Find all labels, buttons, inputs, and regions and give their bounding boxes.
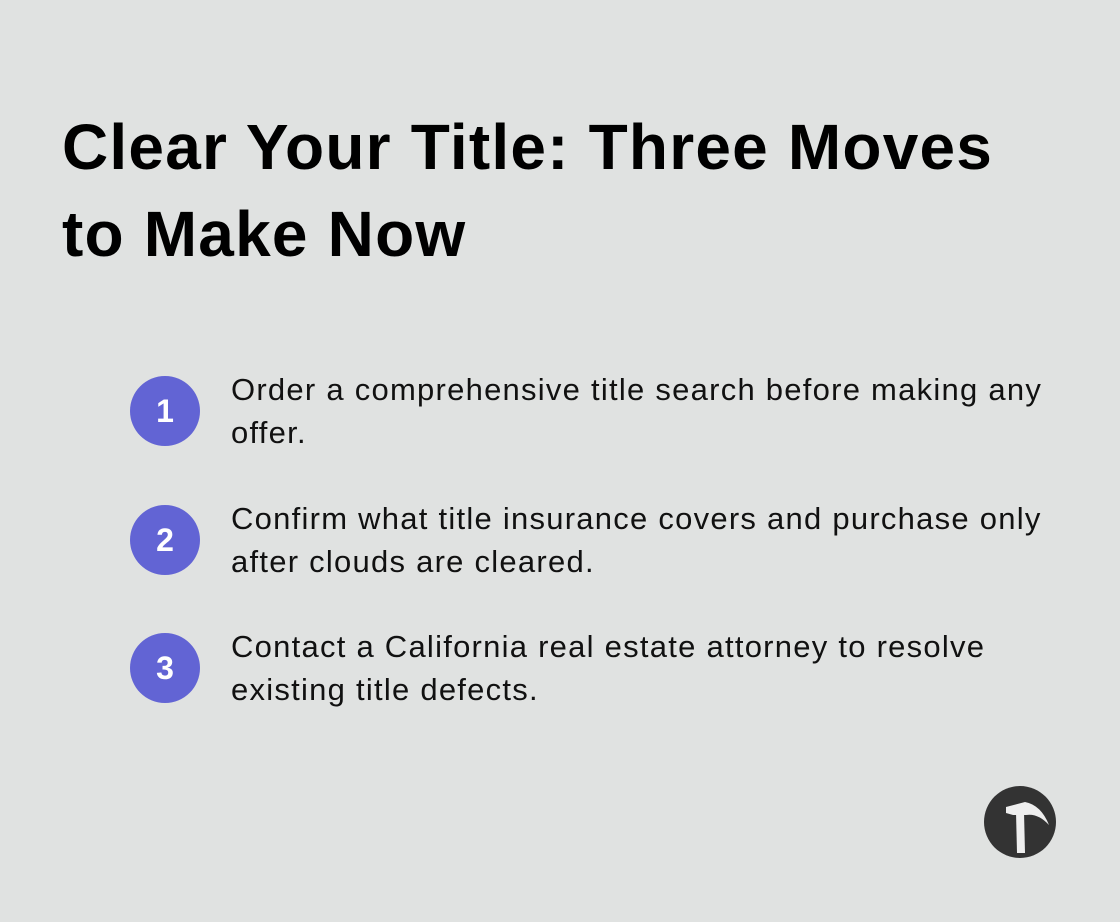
title: Clear Your Title: Three Moves bbox=[62, 111, 993, 183]
item 2 bbox=[130, 501, 1042, 579]
text 3 bbox=[231, 629, 985, 707]
text 2: Confirm what title insurance covers and purchase only bbox=[231, 501, 1042, 536]
number badge 3 bbox=[130, 633, 200, 703]
number badge 2 bbox=[130, 505, 200, 575]
text 3: existing title defects. bbox=[231, 672, 539, 707]
text 1 bbox=[231, 372, 1042, 450]
item 3 bbox=[130, 629, 985, 707]
number badge 1 bbox=[130, 376, 200, 446]
number badge 1: 1 bbox=[156, 393, 174, 429]
title: to Make Now bbox=[62, 198, 466, 270]
number badge 3: 3 bbox=[156, 650, 174, 686]
number badge 2: 2 bbox=[156, 522, 174, 558]
text 2: after clouds are cleared. bbox=[231, 544, 595, 579]
title bbox=[62, 111, 993, 270]
text 1: Order a comprehensive title search before making any bbox=[231, 372, 1042, 407]
text 3: Contact a California real estate attorney to resolve bbox=[231, 629, 985, 664]
text 2 bbox=[231, 501, 1042, 579]
text 1: offer. bbox=[231, 415, 307, 450]
icon: hammer logo bbox=[984, 786, 1056, 858]
item 1 bbox=[130, 372, 1042, 450]
